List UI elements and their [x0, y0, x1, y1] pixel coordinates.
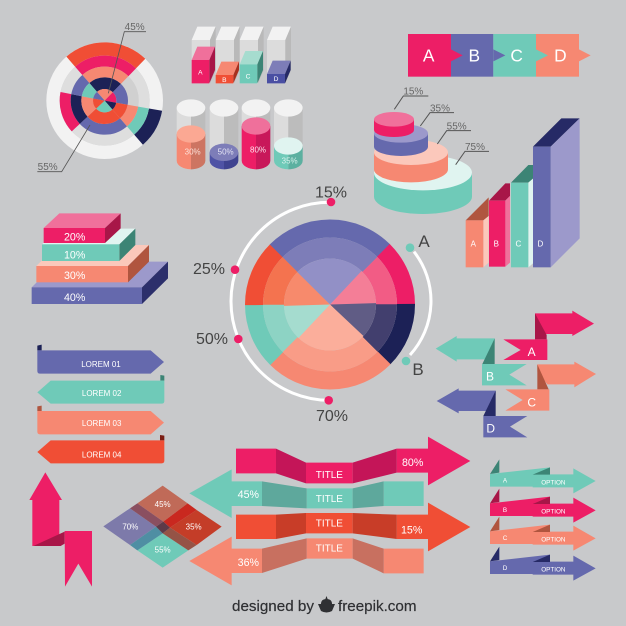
3D rising bars A-D	[466, 118, 580, 267]
arrow strip A B C D: B	[469, 46, 480, 66]
folded arrow flags A-D: B	[486, 370, 494, 384]
overlapping diamonds: 55%	[155, 545, 171, 554]
option arrows: B	[503, 507, 507, 514]
option arrows: OPTION	[541, 509, 566, 516]
radial sector chart: 45%	[125, 22, 145, 33]
white ring with percentage markers: 70%	[316, 408, 348, 425]
3D column bars A-D: C	[246, 74, 251, 81]
footer credit: designed by	[232, 598, 314, 615]
white ring with percentage markers	[193, 184, 431, 425]
central pie chart	[223, 197, 437, 412]
stacked 3D pyramid	[32, 213, 168, 304]
title banner arrows: 15%	[401, 524, 423, 536]
layered cylinder chart: 15%	[403, 87, 423, 98]
title banner arrows: TITLE	[316, 519, 343, 530]
overlapping diamonds	[103, 486, 222, 568]
layered cylinder chart: 35%	[430, 103, 450, 114]
option arrows	[490, 459, 596, 581]
folded arrow flags A-D: A	[528, 345, 536, 359]
option arrows: C	[503, 535, 508, 542]
title banner arrows: 80%	[402, 457, 424, 469]
option arrows: OPTION	[541, 567, 566, 574]
white ring with percentage markers: B	[412, 360, 424, 379]
radial sector chart: 55%	[38, 162, 58, 173]
upward folded arrow	[29, 472, 92, 587]
title banner arrows: TITLE	[316, 470, 343, 481]
cylinder gauges: 35%	[282, 156, 298, 165]
cylinder gauges: 80%	[250, 145, 266, 154]
ribbon list LOREM	[37, 345, 164, 463]
3D column bars A-D	[192, 27, 291, 84]
arrow strip A B C D: A	[423, 46, 435, 66]
white ring with percentage markers: 15%	[315, 184, 347, 202]
overlapping diamonds: 35%	[186, 522, 202, 531]
ribbon list LOREM: LOREM 02	[82, 389, 122, 398]
layered cylinder chart: 75%	[465, 142, 485, 153]
3D rising bars A-D: D	[537, 240, 543, 249]
3D rising bars A-D: B	[494, 240, 499, 249]
radial sector chart	[32, 22, 178, 174]
white ring with percentage markers: 50%	[196, 331, 228, 348]
title banner arrows	[189, 437, 470, 585]
option arrows: OPTION	[541, 537, 566, 544]
cylinder gauges: 50%	[218, 148, 234, 157]
3D column bars A-D: A	[198, 70, 203, 77]
stacked 3D pyramid: 30%	[64, 270, 86, 282]
folded arrow flags A-D	[436, 311, 596, 437]
3D rising bars A-D: C	[515, 240, 521, 249]
layered cylinder chart: 55%	[447, 122, 467, 133]
3D column bars A-D: D	[274, 76, 279, 83]
arrow strip A B C D	[408, 34, 591, 77]
folded arrow flags A-D: C	[527, 396, 536, 410]
footer credit	[232, 596, 416, 615]
white ring with percentage markers: 25%	[193, 261, 225, 278]
footer credit: freepik.com	[338, 598, 416, 615]
ribbon list LOREM: LOREM 03	[82, 419, 122, 428]
layered cylinder chart	[374, 87, 489, 214]
stacked 3D pyramid: 20%	[64, 232, 86, 244]
option arrows: OPTION	[541, 479, 566, 486]
stacked 3D pyramid: 40%	[64, 292, 86, 304]
3D rising bars A-D: A	[471, 240, 477, 249]
overlapping diamonds: 45%	[155, 500, 171, 509]
overlapping diamonds: 70%	[122, 522, 138, 531]
3D column bars A-D: B	[222, 77, 227, 84]
ribbon list LOREM: LOREM 01	[81, 360, 121, 369]
cylinder gauges	[177, 99, 303, 169]
white ring with percentage markers: A	[418, 232, 430, 251]
arrow strip A B C D: C	[510, 46, 523, 66]
folded arrow flags A-D: D	[486, 422, 495, 436]
arrow strip A B C D: D	[554, 46, 567, 66]
option arrows: D	[503, 565, 508, 572]
option arrows: A	[503, 478, 508, 485]
title banner arrows: 45%	[238, 489, 260, 501]
title banner arrows: TITLE	[316, 494, 343, 505]
stacked 3D pyramid: 10%	[64, 250, 86, 262]
title banner arrows: TITLE	[316, 543, 343, 554]
ribbon list LOREM: LOREM 04	[82, 451, 122, 460]
cylinder gauges: 30%	[185, 148, 201, 157]
title banner arrows: 36%	[238, 557, 260, 569]
